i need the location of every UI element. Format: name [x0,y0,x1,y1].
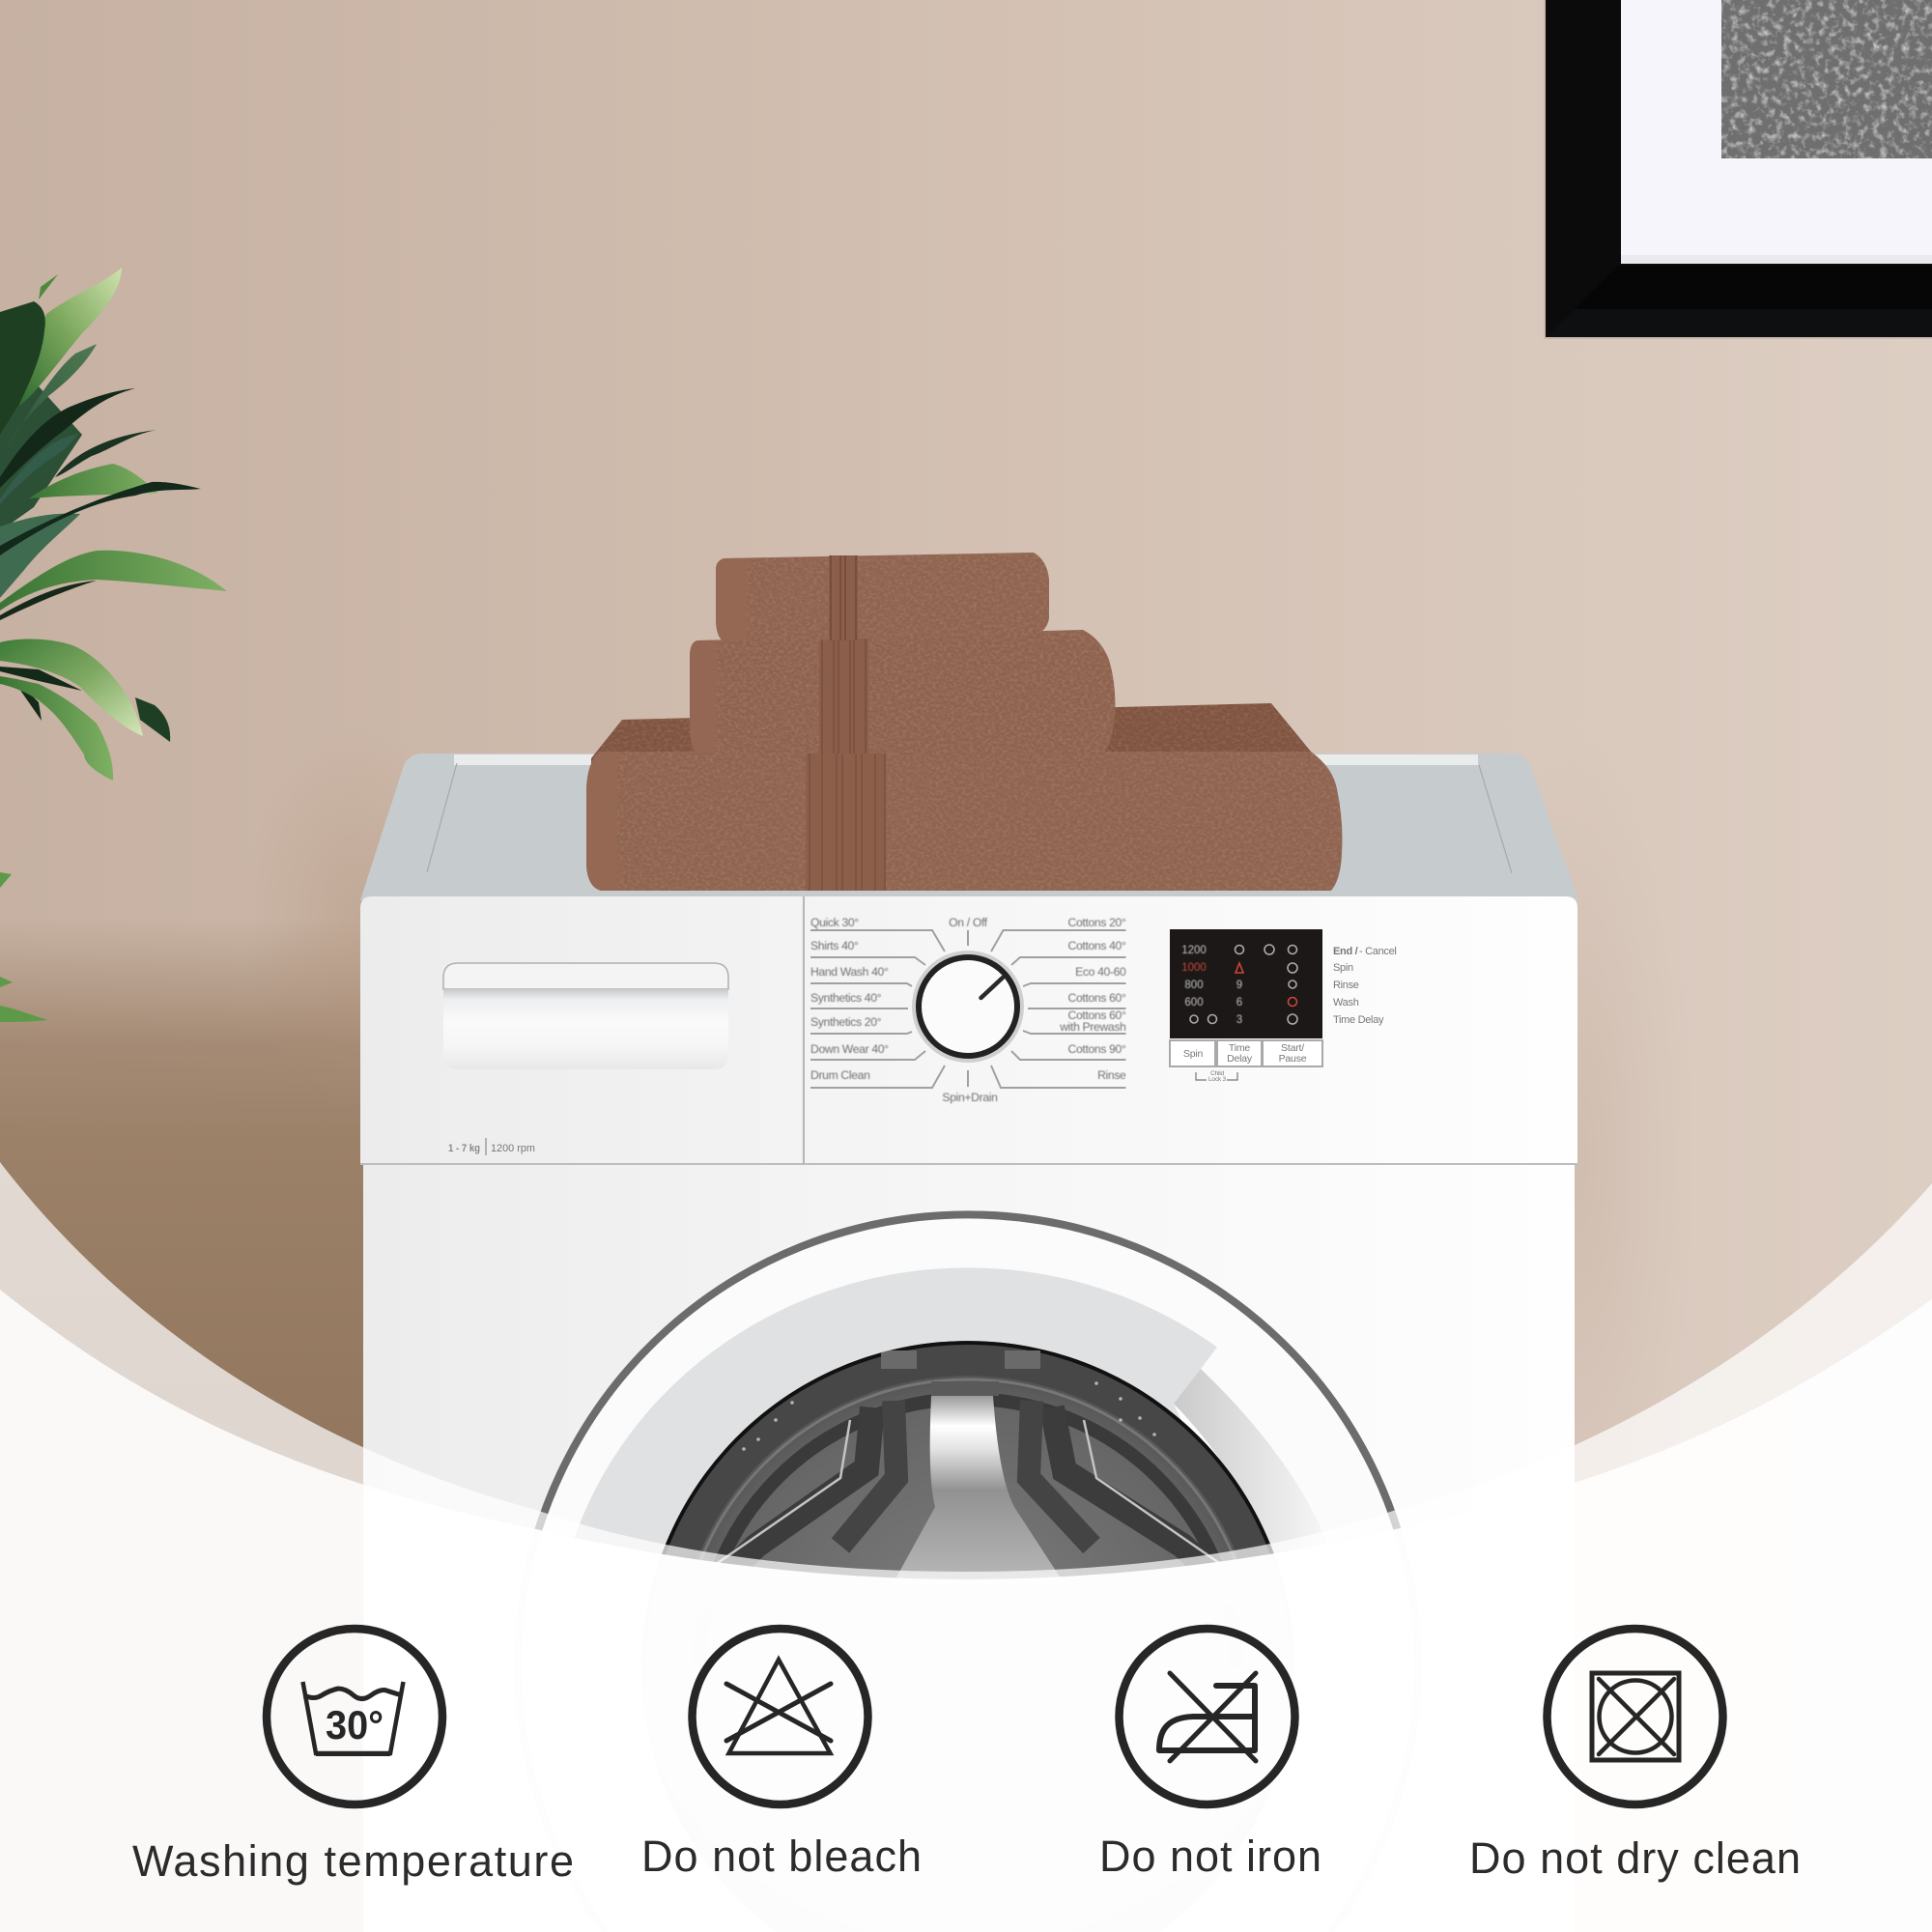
programme dial: Spin+Drain [942,1091,998,1104]
capacity label [448,1138,535,1155]
label: do not bleach: Do not bleach [641,1832,922,1881]
label: washing temperature: Washing temperature [132,1836,574,1886]
bottom white curved panel [0,1290,1932,1932]
detergent drawer [443,963,728,1069]
towel stack [586,553,1342,891]
control display: 6 [1236,997,1242,1009]
framed picture [1544,0,1932,339]
programme dial: with Prewash [1059,1020,1126,1034]
programme dial: Cottons 60° [1068,1009,1126,1022]
capacity label: 1 - 7 kg [448,1143,480,1154]
programme dial: Cottons 40° [1068,939,1126,952]
icon: washing temperature 30 [267,1629,442,1804]
control display: Delay [1227,1053,1253,1065]
icon: washing temperature 30: 30° [326,1702,384,1747]
control display: 1200 [1181,945,1207,956]
icon: do not iron [1119,1629,1294,1804]
control display: Time Delay [1333,1014,1384,1026]
large towel [586,703,1342,891]
control display: 800 [1184,980,1204,991]
programme dial: On / Off [949,916,988,929]
control display: - Cancel [1359,946,1397,957]
control display: 9 [1236,980,1242,991]
medium towel [690,630,1115,753]
machine body [360,896,1577,1932]
programme dial [810,916,1126,1104]
programme dial: Synthetics 40° [810,991,882,1005]
control display: End / [1333,946,1358,957]
plant leaves [0,268,227,1022]
programme dial: Cottons 90° [1068,1042,1126,1056]
programme dial: Rinse [1097,1068,1126,1082]
programme dial: Cottons 60° [1068,991,1126,1005]
control display: 3 [1236,1014,1242,1026]
door and drum [535,1210,1401,1579]
label: do not dry clean: Do not dry clean [1469,1833,1801,1883]
control display: Pause [1279,1053,1307,1065]
translucent curved overlay [0,1162,1932,1932]
control display: Spin [1333,962,1353,974]
small towel [716,553,1049,642]
programme dial: Cottons 20° [1068,916,1126,929]
programme dial: Eco 40-60 [1075,965,1126,979]
control display: Wash [1333,997,1359,1009]
programme dial: Quick 30° [810,916,859,929]
control display [1170,929,1397,1083]
machine lid [360,753,1578,900]
programme dial: Hand Wash 40° [810,965,889,979]
programme dial: Down Wear 40° [810,1042,889,1056]
programme dial: Synthetics 20° [810,1015,882,1029]
control display: 600 [1184,997,1204,1009]
control display: Time [1229,1042,1250,1054]
capacity label: 1200 rpm [491,1143,535,1154]
programme dial: Shirts 40° [810,939,859,952]
control display: Lock 3 [1208,1076,1227,1083]
care icons row [132,1629,1801,1886]
control display: 1000 [1181,962,1207,974]
label: do not iron: Do not iron [1099,1832,1321,1881]
programme dial: Drum Clean [810,1068,870,1082]
icon: do not dry clean [1548,1629,1723,1804]
control display: Rinse [1333,980,1359,991]
control display: Spin [1183,1048,1203,1060]
washing machine [360,753,1578,1579]
control display: Child [1210,1070,1224,1077]
control display: Start/ [1281,1042,1304,1054]
white machine fade column [364,1486,1574,1932]
icon: do not bleach [692,1629,867,1804]
